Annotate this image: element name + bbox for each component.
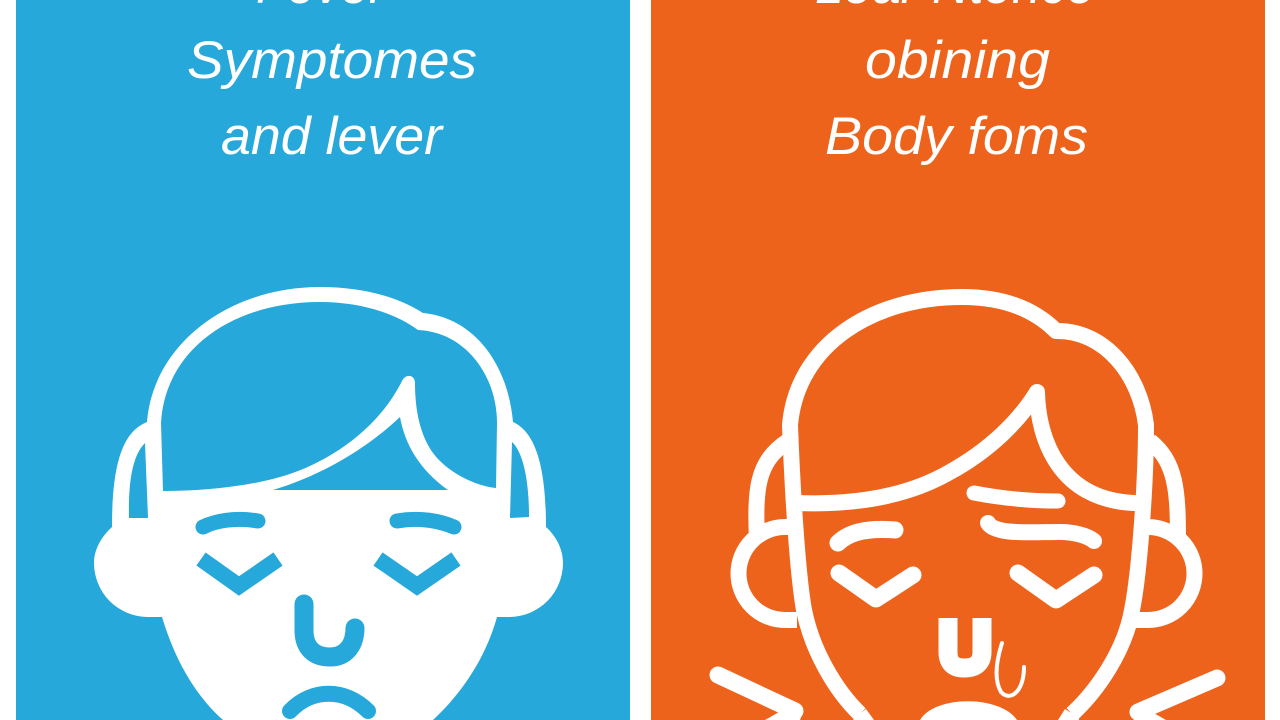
ear tops — [756, 441, 788, 541]
heading: fever: and lever — [221, 107, 444, 166]
head and hair outline — [790, 297, 1146, 714]
heading: fever: Symptomes — [187, 31, 477, 90]
heading: obtaining body forms: Body foms — [825, 107, 1088, 166]
nose — [948, 618, 982, 668]
panel: body symptoms — [651, 0, 1265, 720]
ear gaps — [129, 443, 148, 518]
heading: obtaining body forms: obining — [865, 31, 1051, 90]
forehead triangle — [273, 417, 448, 490]
heading: obtaining body forms — [815, 0, 1095, 166]
cough line right — [1138, 678, 1217, 712]
heading: fever — [187, 0, 477, 166]
open mouth — [920, 701, 1017, 720]
face silhouette — [94, 287, 563, 720]
neck ends — [853, 709, 874, 720]
eyes — [839, 573, 913, 599]
cough tail left — [765, 703, 803, 720]
brows, eyes, nose, mouth — [201, 519, 456, 711]
ears — [738, 527, 797, 620]
cough tail right — [1130, 704, 1166, 720]
cough lines — [718, 675, 795, 711]
icon: coughing face — [718, 297, 1217, 720]
panel: fever symptoms — [16, 0, 630, 720]
hair left region — [161, 302, 497, 491]
icon: sad face with fever — [94, 287, 563, 720]
fringe — [797, 392, 1134, 503]
neck ends right — [1058, 709, 1079, 720]
brows — [838, 529, 895, 543]
